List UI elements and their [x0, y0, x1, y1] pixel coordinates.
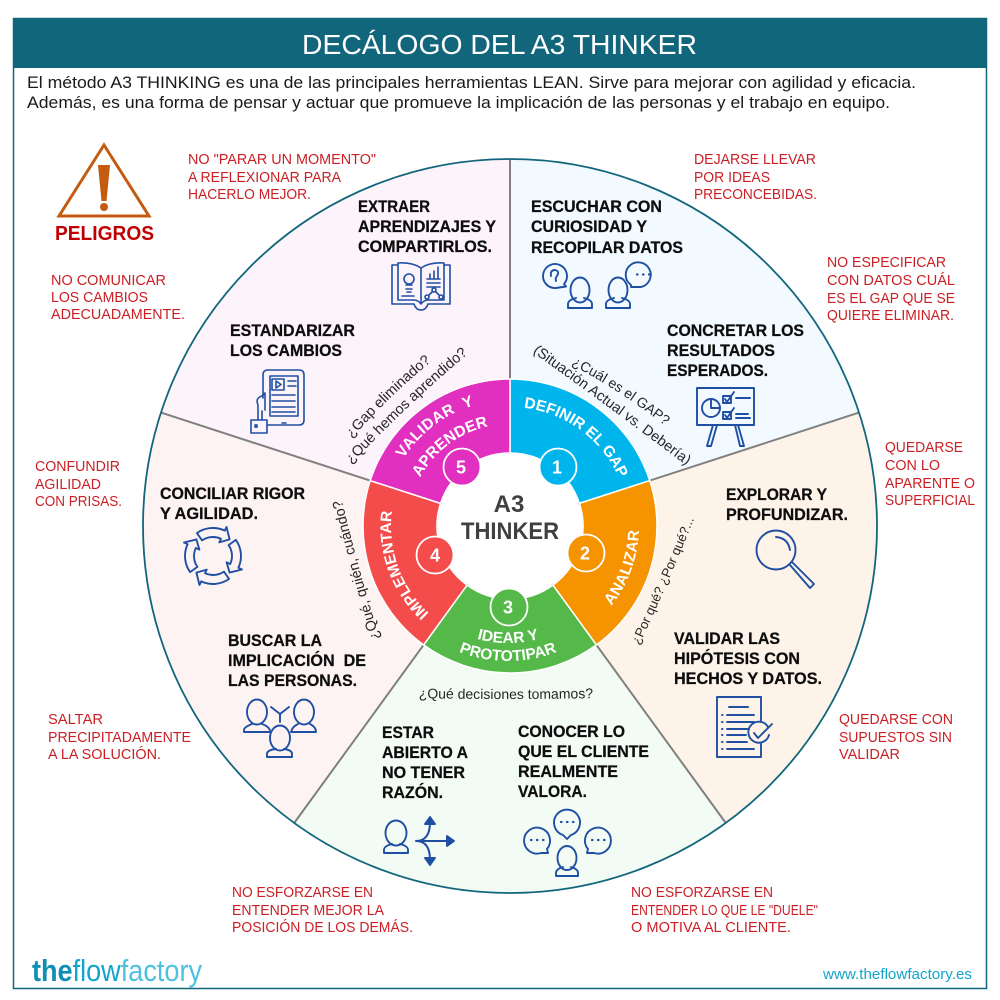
action: explorar y profundizar	[726, 486, 848, 524]
action: buscar implicacion: LAS PERSONAS.	[228, 672, 357, 690]
warning icon and label: peligros: PELIGROS	[55, 222, 154, 245]
action: concretar resultados	[667, 322, 804, 380]
panel: implementar	[143, 413, 510, 823]
question: situacion actual vs deberia: (Situación Actual vs. Debería)	[534, 346, 690, 466]
danger: saltar a la solucion: PRECIPITADAMENTE	[48, 730, 191, 746]
question: cual es el gap: ¿Cuál es el GAP?	[572, 360, 670, 424]
icon: customer with speech bubbles	[524, 810, 611, 876]
danger: agilidad con prisas	[35, 459, 122, 510]
action: explorar y profundizar: EXPLORAR Y	[726, 486, 827, 504]
danger: duele al cliente: ENTENDER LO QUE LE "DUELE"	[631, 903, 818, 919]
action: extraer aprendizajes: APRENDIZAJES Y	[358, 218, 496, 236]
danger: supuestos sin validar	[839, 712, 953, 763]
danger: especificar gap	[827, 255, 955, 324]
number badge 4	[416, 536, 454, 574]
intro text: El método A3 THINKING es una de las principales herramientas LEAN. Sirve para mejorar con agilidad y eficacia.	[27, 74, 916, 92]
question: gap eliminado: ¿Gap eliminado?	[348, 355, 428, 438]
danger: comunicar cambios	[51, 273, 185, 323]
danger: comunicar cambios: ADECUADAMENTE.	[51, 307, 185, 323]
number badge 5	[444, 448, 480, 486]
danger: ideas preconcebidas: DEJARSE LLEVAR	[694, 152, 816, 168]
icon: person with diverging arrows	[384, 817, 454, 865]
panel: idear y prototipar	[294, 526, 726, 893]
center circle label: A3	[494, 491, 524, 518]
danger: aparente o superficial	[885, 440, 975, 509]
danger: aparente o superficial: APARENTE O	[885, 476, 975, 492]
ring label: aprender: APRENDER	[413, 416, 488, 478]
wheel background	[143, 159, 877, 893]
panel: definir el gap	[510, 159, 859, 526]
danger: supuestos sin validar: QUEDARSE CON	[839, 712, 953, 728]
question: que quien cuando: ¿Qué, quién, cuándo?	[332, 502, 382, 638]
action: conocer al cliente: VALORA.	[518, 783, 587, 801]
action: estandarizar los cambios: LOS CAMBIOS	[230, 342, 342, 360]
danger: parar un momento: HACERLO MEJOR.	[188, 187, 311, 203]
danger: especificar gap: CON DATOS CUÁL	[827, 272, 955, 289]
danger: ideas preconcebidas: POR IDEAS	[694, 170, 770, 186]
ring label: implementar: IMPLEMENTAR	[380, 512, 428, 620]
action: concretar resultados: CONCRETAR LOS	[667, 322, 804, 340]
center circle label: THINKER	[461, 518, 559, 545]
danger: especificar gap: QUIERE ELIMINAR.	[827, 308, 954, 324]
center circle label	[438, 454, 582, 598]
icon: three connected people	[244, 700, 316, 757]
action: estar abierto: RAZÓN.	[382, 783, 443, 802]
action: escuchar con curiosidad: ESCUCHAR CON	[531, 198, 662, 216]
icon: magnifying glass	[756, 530, 814, 588]
danger: ideas preconcebidas	[694, 152, 817, 203]
danger: posicion de los demas: POSICIÓN DE LOS DEMÁS.	[232, 919, 413, 936]
action: estar abierto: ABIERTO A	[382, 744, 468, 762]
danger: aparente o superficial: QUEDARSE	[885, 440, 963, 456]
title banner	[13, 18, 987, 68]
panel: analizar	[510, 413, 877, 823]
icon: document with check	[717, 697, 772, 757]
action: extraer aprendizajes: COMPARTIRLOS.	[358, 238, 492, 256]
ring segment 2 orange	[553, 481, 657, 645]
action: conciliar rigor: CONCILIAR RIGOR	[160, 485, 305, 503]
danger: posicion de los demas: NO ESFORZARSE EN	[232, 885, 373, 901]
danger: aparente o superficial: CON LO	[885, 458, 940, 474]
number badge 3: 3	[503, 598, 513, 618]
danger: especificar gap: NO ESPECIFICAR	[827, 255, 946, 271]
ring label: definir el gap: DEFINIR EL GAP	[524, 397, 628, 475]
danger: saltar a la solucion	[48, 712, 191, 763]
action: conciliar rigor: Y AGILIDAD.	[160, 505, 258, 523]
question: que hemos aprendido: ¿Qué hemos aprendido?	[348, 348, 466, 464]
icon: cycle arrows	[184, 527, 242, 585]
question: que decisiones tomamos: ¿Qué decisiones tomamos?	[420, 688, 592, 701]
warning icon and label: peligros	[55, 145, 154, 245]
action: extraer aprendizajes	[358, 198, 496, 256]
number badge 5: 5	[456, 458, 466, 478]
number badge 2	[568, 534, 604, 572]
danger: saltar a la solucion: A LA SOLUCIÓN.	[48, 746, 161, 763]
ring segment 4 red	[363, 481, 467, 645]
danger: supuestos sin validar: VALIDAR	[839, 747, 900, 763]
action: validar hipotesis: HIPÓTESIS CON	[674, 649, 800, 668]
action: estar abierto: NO TENER	[382, 764, 465, 782]
action: validar hipotesis: HECHOS Y DATOS.	[674, 670, 822, 688]
danger: duele al cliente: NO ESFORZARSE EN	[631, 885, 773, 901]
ring segment 1 blue	[510, 379, 650, 503]
action: conocer al cliente: CONOCER LO	[518, 723, 625, 741]
action: estar abierto: ESTAR	[382, 724, 434, 742]
danger: parar un momento	[188, 152, 376, 203]
danger: comunicar cambios: NO COMUNICAR	[51, 273, 166, 289]
icon: presentation board	[697, 388, 754, 446]
ring label: analizar: ANALIZAR	[605, 530, 639, 606]
icon: open book	[392, 263, 450, 310]
danger: comunicar cambios: LOS CAMBIOS	[51, 290, 148, 306]
action: estandarizar los cambios	[230, 322, 355, 360]
intro text: Además, es una forma de pensar y actuar que promueve la implicación de las personas y el trabajo en equipo.	[27, 94, 890, 112]
panel: validar y aprender	[161, 159, 510, 526]
title: DECÁLOGO DEL A3 THINKER	[302, 29, 697, 60]
action: validar hipotesis	[674, 630, 822, 688]
action: estar abierto	[382, 724, 468, 802]
number badge 4: 4	[430, 546, 440, 566]
action: buscar implicacion: BUSCAR LA	[228, 632, 322, 650]
danger: duele al cliente	[631, 885, 818, 936]
ring segment 3 green	[424, 585, 596, 673]
danger notes	[35, 152, 975, 936]
danger: parar un momento: A REFLEXIONAR PARA	[188, 170, 341, 186]
action: conocer al cliente: REALMENTE	[518, 763, 618, 781]
intro text	[27, 74, 916, 112]
action: buscar implicacion: IMPLICACIÓN DE	[228, 651, 366, 670]
danger: agilidad con prisas: CONFUNDIR	[35, 459, 120, 475]
action: concretar resultados: ESPERADOS.	[667, 362, 768, 380]
ring label: prototipar: PROTOTIPAR	[460, 642, 557, 662]
danger: parar un momento: NO "PARAR UN MOMENTO"	[188, 152, 376, 168]
icon: hand holding tablet	[251, 370, 304, 433]
action: buscar implicacion	[228, 632, 366, 690]
action: validar hipotesis: VALIDAR LAS	[674, 630, 780, 648]
danger: agilidad con prisas: CON PRISAS.	[35, 494, 122, 510]
number badge 2: 2	[580, 544, 590, 564]
danger: especificar gap: ES EL GAP QUE SE	[827, 291, 955, 307]
ring label: idear y: IDEAR Y	[478, 628, 536, 643]
danger: supuestos sin validar: SUPUESTOS SIN	[839, 730, 952, 746]
logo: theflowfactory: theflowfactory	[32, 953, 202, 988]
question: por que: ¿Por qué? ¿Por qué?...	[634, 520, 694, 645]
danger: posicion de los demas	[232, 885, 413, 936]
danger: ideas preconcebidas: PRECONCEBIDAS.	[694, 187, 817, 203]
danger: aparente o superficial: SUPERFICIAL	[885, 493, 975, 509]
ring label: validar y: VALIDAR Y	[394, 395, 470, 456]
action: conocer al cliente: QUE EL CLIENTE	[518, 743, 649, 761]
danger: saltar a la solucion: SALTAR	[48, 712, 103, 728]
number badge 3	[490, 588, 528, 626]
action: escuchar con curiosidad	[531, 198, 683, 257]
action: concretar resultados: RESULTADOS	[667, 342, 775, 360]
action: extraer aprendizajes: EXTRAER	[358, 198, 430, 216]
action: escuchar con curiosidad: CURIOSIDAD Y	[531, 218, 647, 236]
number badge 1: 1	[552, 458, 562, 478]
action: escuchar con curiosidad: RECOPILAR DATOS	[531, 239, 683, 257]
icon: people with speech bubbles	[543, 262, 651, 308]
website url: www.theflowfactory.es	[822, 967, 972, 983]
center ring	[363, 379, 657, 673]
action: explorar y profundizar: PROFUNDIZAR.	[726, 506, 848, 524]
action: conocer al cliente	[518, 723, 649, 801]
danger: agilidad con prisas: AGILIDAD	[35, 477, 101, 493]
number badge 1	[540, 448, 576, 486]
action: estandarizar los cambios: ESTANDARIZAR	[230, 322, 355, 340]
ring segment 5 magenta	[370, 379, 510, 503]
danger: posicion de los demas: ENTENDER MEJOR LA	[232, 903, 384, 919]
action: conciliar rigor	[160, 485, 305, 523]
danger: duele al cliente: O MOTIVA AL CLIENTE.	[631, 920, 791, 936]
